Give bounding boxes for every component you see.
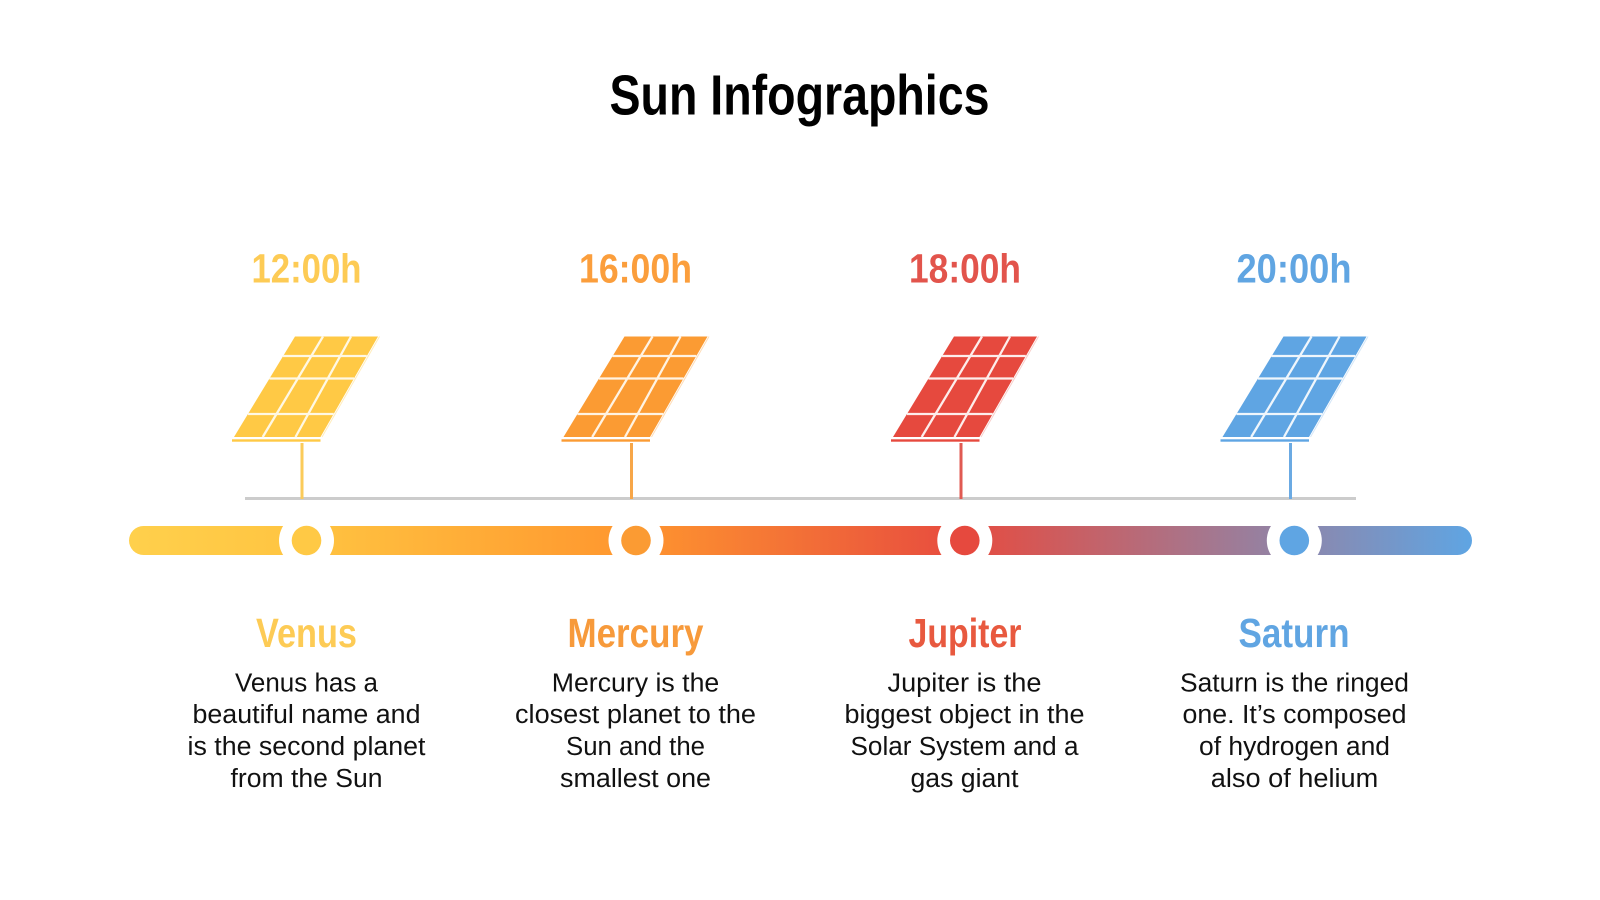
description: Jupiter: gas giant (910, 765, 1018, 793)
description: Venus: is the second planet (188, 733, 426, 761)
description: Mercury: Sun and the (566, 733, 705, 761)
marker: Jupiter (937, 513, 992, 568)
description: Mercury: closest planet to the (515, 701, 756, 729)
time: 20:00h: 20:00h (1236, 246, 1352, 292)
description: Jupiter: biggest object in the (844, 701, 1084, 729)
description: Saturn: also of helium (1211, 765, 1378, 793)
description: Saturn (1180, 670, 1409, 793)
time: 16:00h: 16:00h (579, 246, 692, 292)
description: Venus: from the Sun (230, 765, 382, 793)
marker: Saturn (1267, 513, 1322, 568)
description: Saturn: of hydrogen and (1199, 733, 1390, 761)
icon: solar panel orange (562, 336, 709, 499)
description: Saturn: Saturn is the ringed (1180, 670, 1409, 698)
column: Mercury (515, 246, 756, 793)
name: Jupiter: Jupiter (908, 610, 1022, 656)
icon: solar panel red (891, 336, 1038, 499)
column: Jupiter (844, 246, 1084, 793)
description: Venus: Venus has a (235, 670, 379, 698)
description: Jupiter (844, 670, 1084, 793)
name: Saturn: Saturn (1238, 610, 1350, 656)
time: 18:00h: 18:00h (909, 246, 1021, 292)
description: Mercury: Mercury is the (552, 670, 719, 698)
name: Mercury: Mercury (568, 610, 704, 656)
icon: solar panel blue (1220, 336, 1368, 499)
description: Venus: beautiful name and (192, 701, 420, 729)
description: Saturn: one. It’s composed (1182, 701, 1406, 729)
column: Venus (188, 246, 426, 793)
time: 12:00h: 12:00h (252, 246, 362, 292)
title: Sun Infographics (610, 64, 990, 128)
name: Venus: Venus (256, 610, 357, 656)
icon: solar panel yellow (232, 336, 380, 499)
description: Mercury (515, 670, 756, 793)
description: Mercury: smallest one (560, 765, 711, 793)
column: Saturn (1180, 246, 1409, 793)
marker: Venus (279, 513, 334, 568)
marker: Mercury (608, 513, 664, 568)
description: Jupiter: Solar System and a (850, 733, 1079, 761)
description: Jupiter: Jupiter is the (888, 670, 1042, 698)
grey rail (245, 497, 1356, 500)
description: Venus (188, 670, 426, 793)
timeline bar (129, 513, 1472, 568)
